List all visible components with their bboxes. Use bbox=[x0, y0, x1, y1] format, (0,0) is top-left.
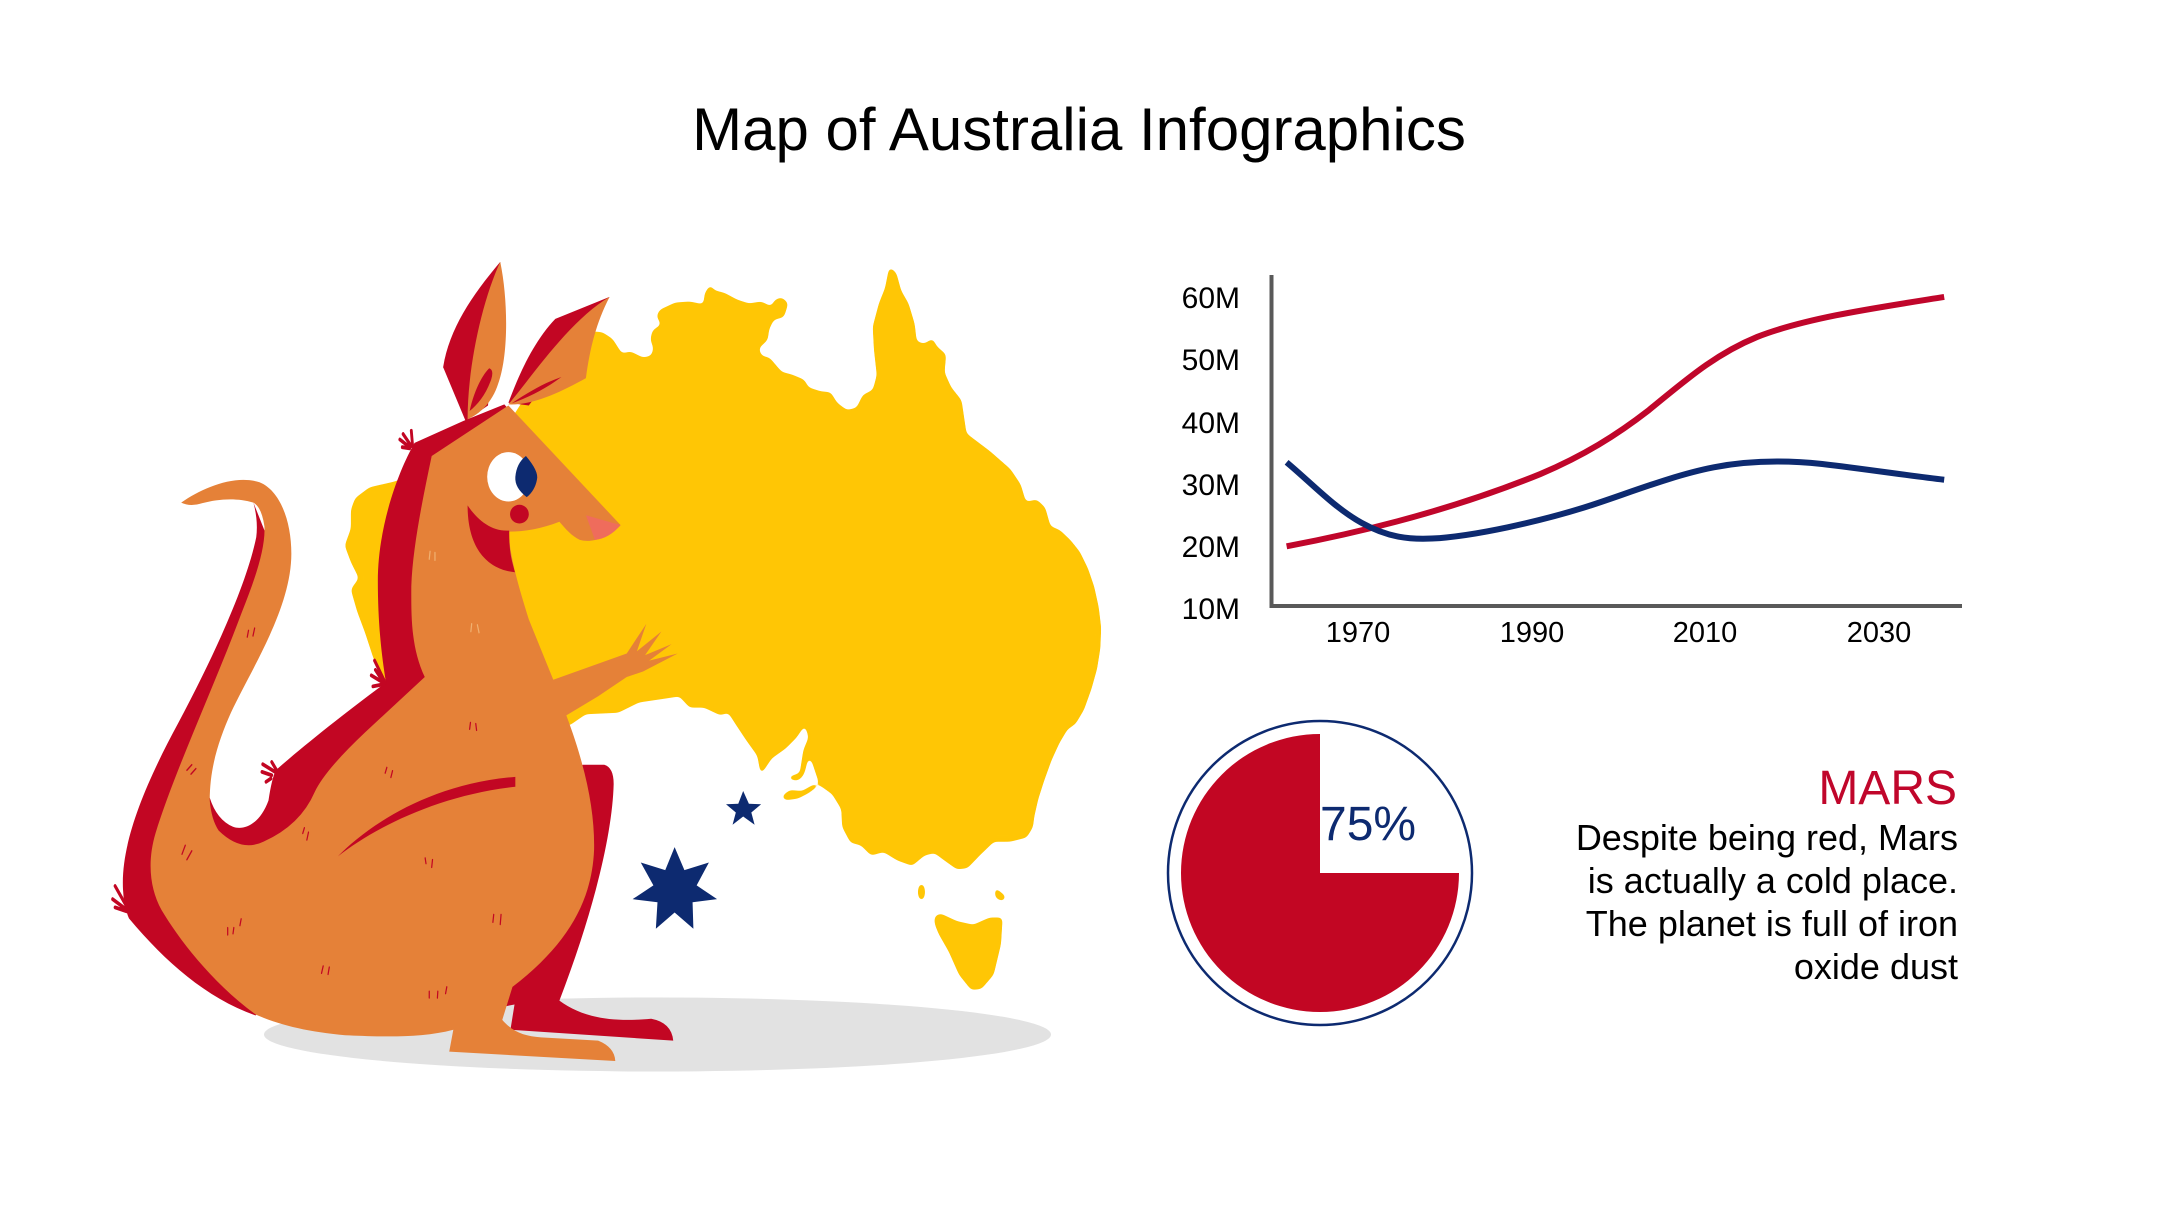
fur tufts bbox=[113, 431, 413, 911]
Mars text block bbox=[1576, 762, 1958, 987]
mainland bbox=[345, 268, 1101, 869]
hind leg bbox=[506, 765, 673, 1041]
arm crease bbox=[338, 777, 515, 856]
Mars description: The planet is full of iron bbox=[1586, 903, 1958, 944]
Mars heading: MARS bbox=[1818, 762, 1957, 815]
ground shadow bbox=[264, 998, 1051, 1072]
large navy star bbox=[633, 847, 717, 929]
y axis labels: 40M bbox=[1182, 407, 1240, 440]
y axis labels: 60M bbox=[1182, 282, 1240, 315]
x axis labels: 2010 bbox=[1673, 617, 1737, 649]
Tasmania bbox=[935, 913, 1003, 990]
x axis labels: 1970 bbox=[1326, 617, 1390, 649]
Flinders Island bbox=[994, 887, 1007, 901]
mouth bbox=[468, 505, 515, 572]
fur ticks bbox=[182, 628, 501, 998]
y axis labels: 30M bbox=[1182, 469, 1240, 502]
Mars description: Despite being red, Mars bbox=[1576, 817, 1958, 858]
x axis labels: 2030 bbox=[1847, 617, 1911, 649]
left ear bbox=[443, 262, 506, 421]
y axis labels bbox=[1182, 282, 1240, 626]
Mars description: is actually a cold place. bbox=[1588, 860, 1958, 901]
Eyre islet bbox=[781, 784, 820, 800]
small navy star bbox=[726, 791, 761, 825]
percent label: 75% bbox=[1320, 798, 1416, 851]
Mars description: oxide dust bbox=[1794, 946, 1958, 987]
tail shadow bbox=[123, 503, 325, 1015]
cheek bbox=[510, 505, 529, 523]
Mars description bbox=[1576, 817, 1958, 987]
y axis labels: 20M bbox=[1182, 531, 1240, 564]
title: Map of Australia Infographics bbox=[692, 96, 1466, 163]
x axis labels bbox=[1326, 617, 1911, 649]
back shadow bbox=[202, 404, 512, 861]
y axis labels: 10M bbox=[1182, 593, 1240, 626]
navy line bbox=[1287, 462, 1944, 539]
chart axes bbox=[1272, 275, 1962, 606]
body, head and tail bbox=[151, 406, 678, 1061]
map of Australia bbox=[345, 268, 1101, 990]
pie chart 75% bbox=[1168, 721, 1472, 1025]
y axis labels: 50M bbox=[1182, 344, 1240, 377]
eye bbox=[487, 452, 537, 502]
kangaroo illustration bbox=[113, 262, 678, 1061]
pie slice bbox=[1181, 734, 1459, 1012]
right ear bbox=[508, 297, 610, 406]
King Island bbox=[918, 883, 925, 901]
population line chart bbox=[1182, 275, 1962, 649]
nose bbox=[586, 515, 621, 540]
light fur ticks bbox=[429, 551, 479, 633]
Kangaroo Island bbox=[788, 773, 804, 781]
pie outer ring bbox=[1168, 721, 1472, 1025]
red line bbox=[1287, 297, 1944, 546]
x axis labels: 1990 bbox=[1500, 617, 1564, 649]
